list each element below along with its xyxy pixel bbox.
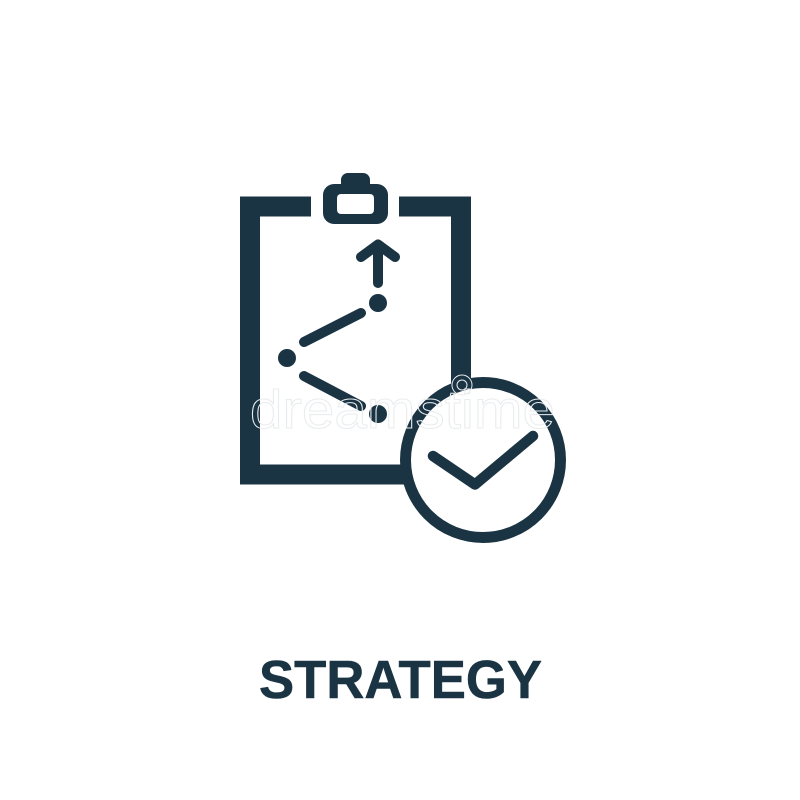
icon: clipboard with strategy plan [250,173,461,474]
icon: check mark badge [406,382,560,538]
plan path: dots and dashes [278,294,387,423]
clipboard clip [323,173,388,224]
watermark: dreamstime [250,380,555,440]
arrow pointing up [361,244,395,283]
title: STRATEGY [259,650,542,710]
clipboard board outline [250,206,461,474]
